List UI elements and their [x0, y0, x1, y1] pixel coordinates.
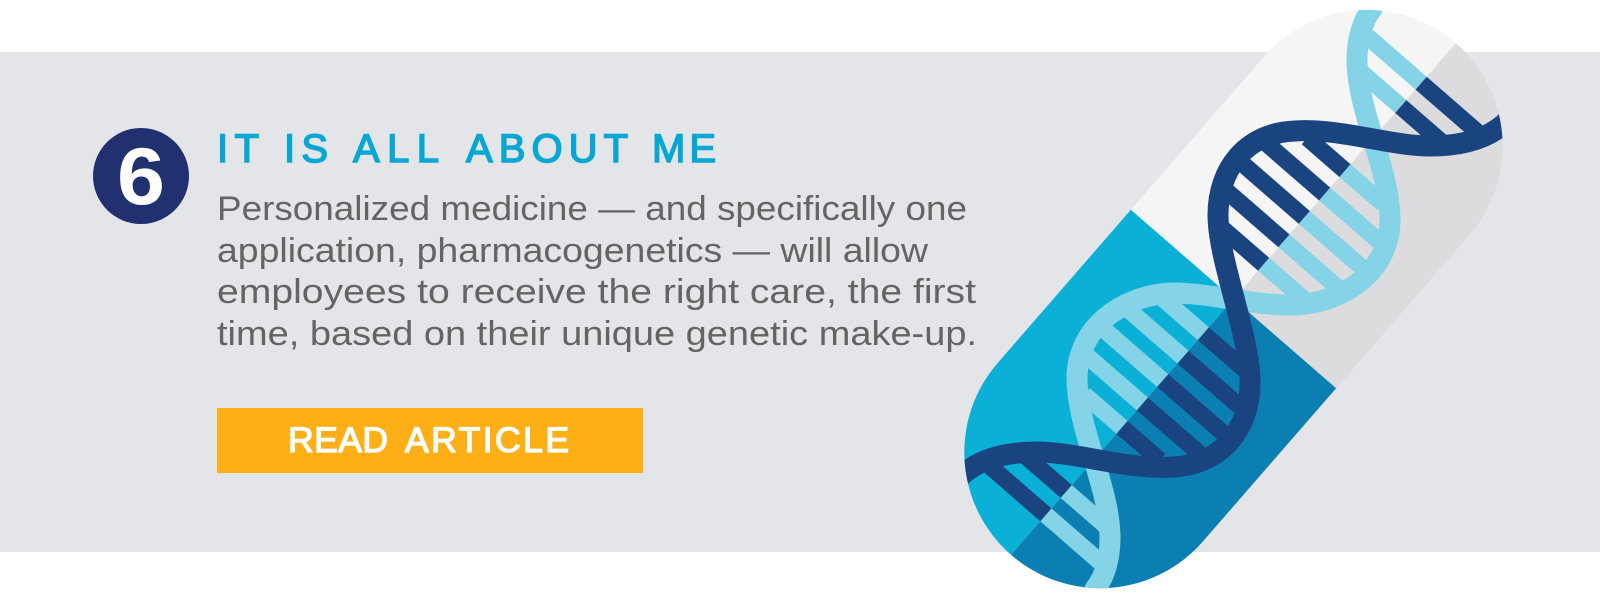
heading: ALL	[353, 127, 439, 171]
capsule with DNA helix	[957, 9, 1510, 589]
read article button: ARTICLE	[405, 420, 569, 460]
body text	[217, 190, 977, 353]
number badge: 6	[117, 132, 165, 222]
body text: application, pharmacogenetics — will allow	[217, 232, 928, 270]
DNA helix clipped to capsule	[957, 9, 1510, 589]
DNA base pair rungs, upper half	[1228, 30, 1483, 294]
read article button: READ	[288, 420, 388, 460]
read article button	[217, 408, 643, 473]
capsule body	[964, 10, 1503, 588]
heading: ME	[652, 127, 716, 171]
body text: time, based on their unique genetic make-up.	[217, 315, 977, 353]
body text: Personalized medicine — and specifically one	[217, 190, 967, 228]
body text: employees to receive the right care, the first	[217, 273, 976, 311]
heading: IS	[284, 127, 328, 171]
number badge	[93, 128, 189, 224]
heading: ABOUT	[466, 127, 628, 171]
heading: IT	[217, 127, 259, 171]
navy DNA strand	[957, 118, 1510, 480]
DNA base pair rungs, lower half	[984, 304, 1240, 568]
light DNA strand	[1077, 9, 1390, 589]
heading	[217, 127, 716, 171]
